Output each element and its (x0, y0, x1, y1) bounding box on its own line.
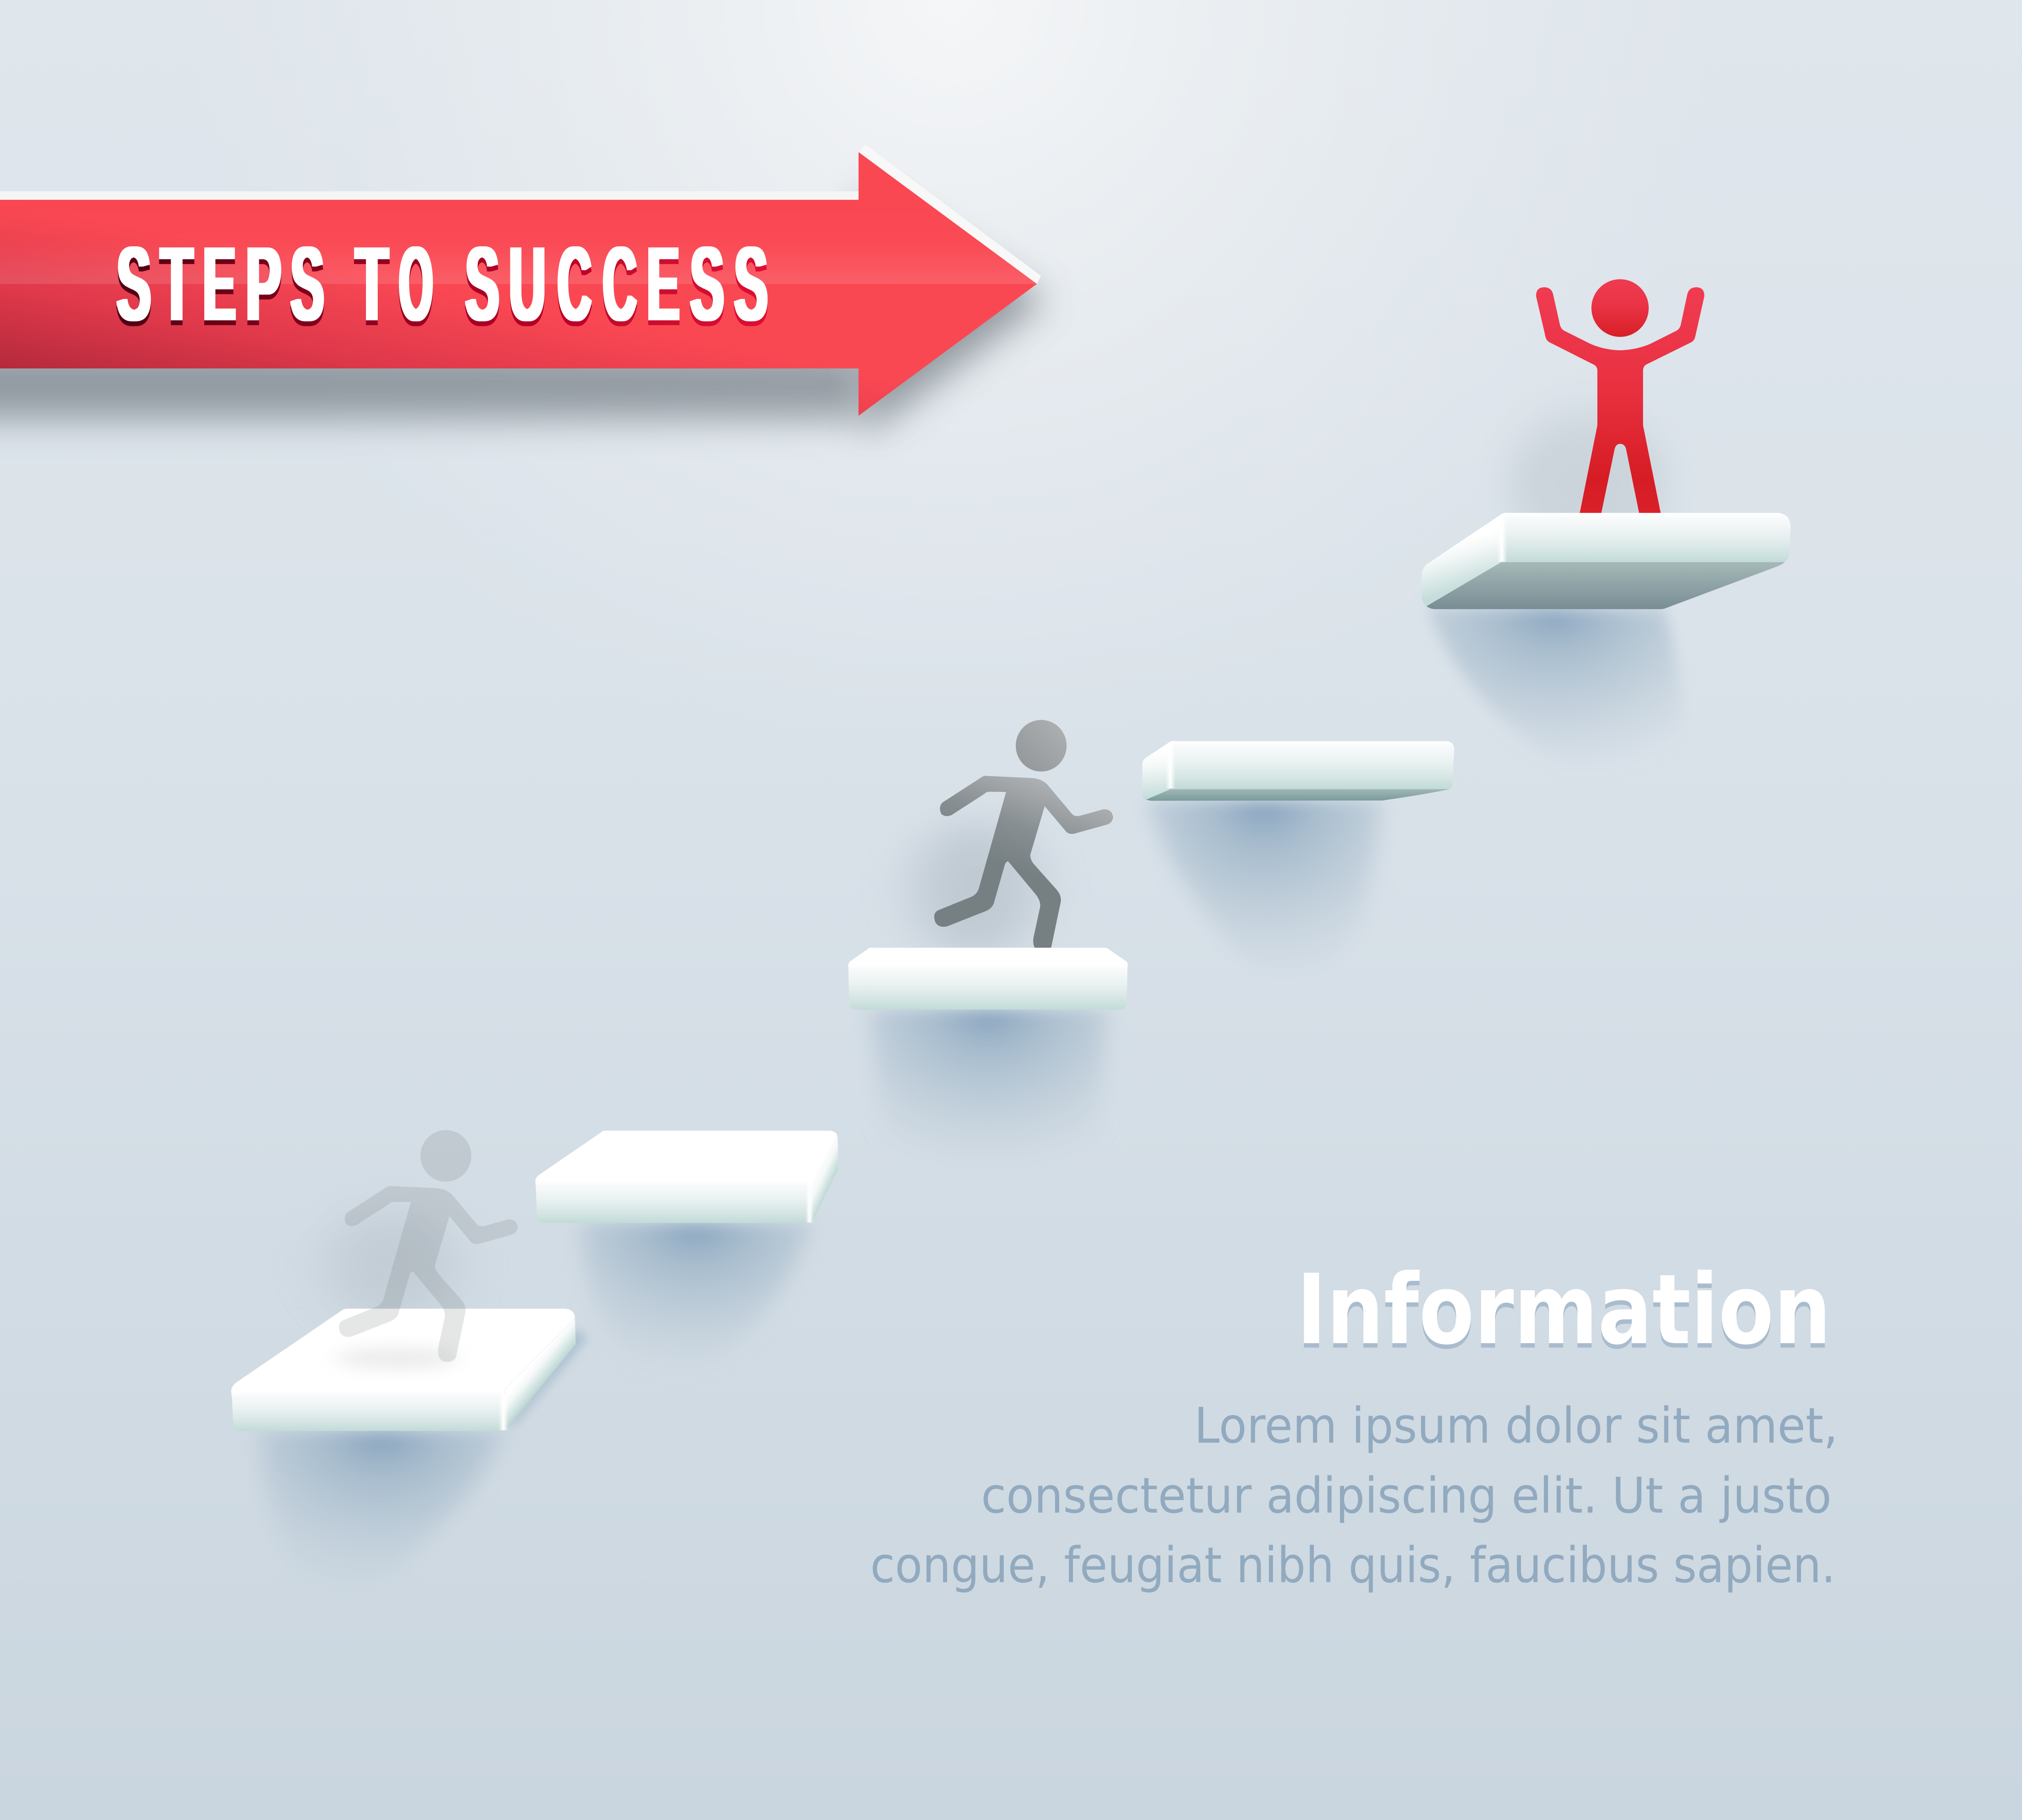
banner title: P (246, 224, 281, 343)
platform shadow (870, 1009, 1107, 1170)
information body text: congue, feugiat nibh quis, faucibus sapien. (870, 1537, 1836, 1594)
arrow top highlight (0, 145, 1041, 284)
winner shadow (1508, 414, 1667, 554)
banner title: C (603, 224, 637, 343)
step 5: top platform with red winner (1421, 279, 1791, 773)
banner title: S (690, 229, 724, 348)
step 4: upper middle platform (1142, 741, 1454, 983)
arrow gloss band (0, 152, 1037, 284)
platform (231, 1309, 576, 1431)
banner title: S (291, 229, 324, 348)
platform shadow (579, 1223, 812, 1376)
runner floor shadow (336, 1347, 459, 1369)
banner title: T (355, 229, 388, 348)
information heading: Information (1297, 1254, 1831, 1366)
arrow body (0, 152, 1037, 416)
information body text: consectetur adipiscing elit. Ut a justo (981, 1467, 1832, 1524)
platform shadow (259, 1327, 584, 1597)
banner title: T (161, 224, 193, 343)
icon: faded runner (339, 1130, 518, 1362)
banner title: U (509, 224, 546, 343)
platform shadow (1147, 800, 1381, 983)
information heading: Information (1297, 1258, 1831, 1371)
step 3: middle platform with grey runner (848, 720, 1127, 1170)
platform (1142, 741, 1454, 801)
banner title: C (558, 224, 591, 343)
banner title: E (647, 229, 679, 348)
banner title: S (117, 229, 151, 348)
banner title: P (246, 229, 281, 348)
banner title: O (399, 224, 433, 343)
arrow drop shadow (0, 194, 1047, 435)
banner title: C (603, 229, 637, 348)
banner title: S (465, 224, 499, 343)
step 2: lower middle platform (535, 1131, 838, 1376)
banner title: E (203, 229, 236, 348)
runner shadow (914, 821, 1037, 957)
platform (1421, 513, 1791, 609)
banner title (117, 224, 768, 348)
platform (535, 1131, 838, 1223)
banner title: S (291, 224, 324, 343)
banner title: E (203, 224, 236, 343)
banner title: U (509, 229, 546, 348)
banner title: E (647, 224, 679, 343)
banner arrow: S (734, 224, 768, 343)
banner arrow (0, 145, 1047, 435)
banner title: C (558, 229, 591, 348)
information body text: Lorem ipsum dolor sit amet, (1194, 1397, 1838, 1454)
banner title: S (690, 224, 724, 343)
banner title: S (117, 224, 151, 343)
information body text (870, 1397, 1838, 1594)
platform (848, 948, 1127, 1009)
icon: grey runner (934, 720, 1113, 952)
faded runner wall shadow (325, 1210, 457, 1321)
banner title: T (355, 224, 388, 343)
banner title: T (161, 229, 193, 348)
banner title: O (399, 229, 433, 348)
banner title: S (465, 229, 499, 348)
step 1: bottom platform with faded runner (231, 1210, 584, 1597)
banner arrow: S (734, 229, 768, 348)
platform shadow (1426, 606, 1683, 773)
icon: winner figure (1536, 279, 1704, 514)
